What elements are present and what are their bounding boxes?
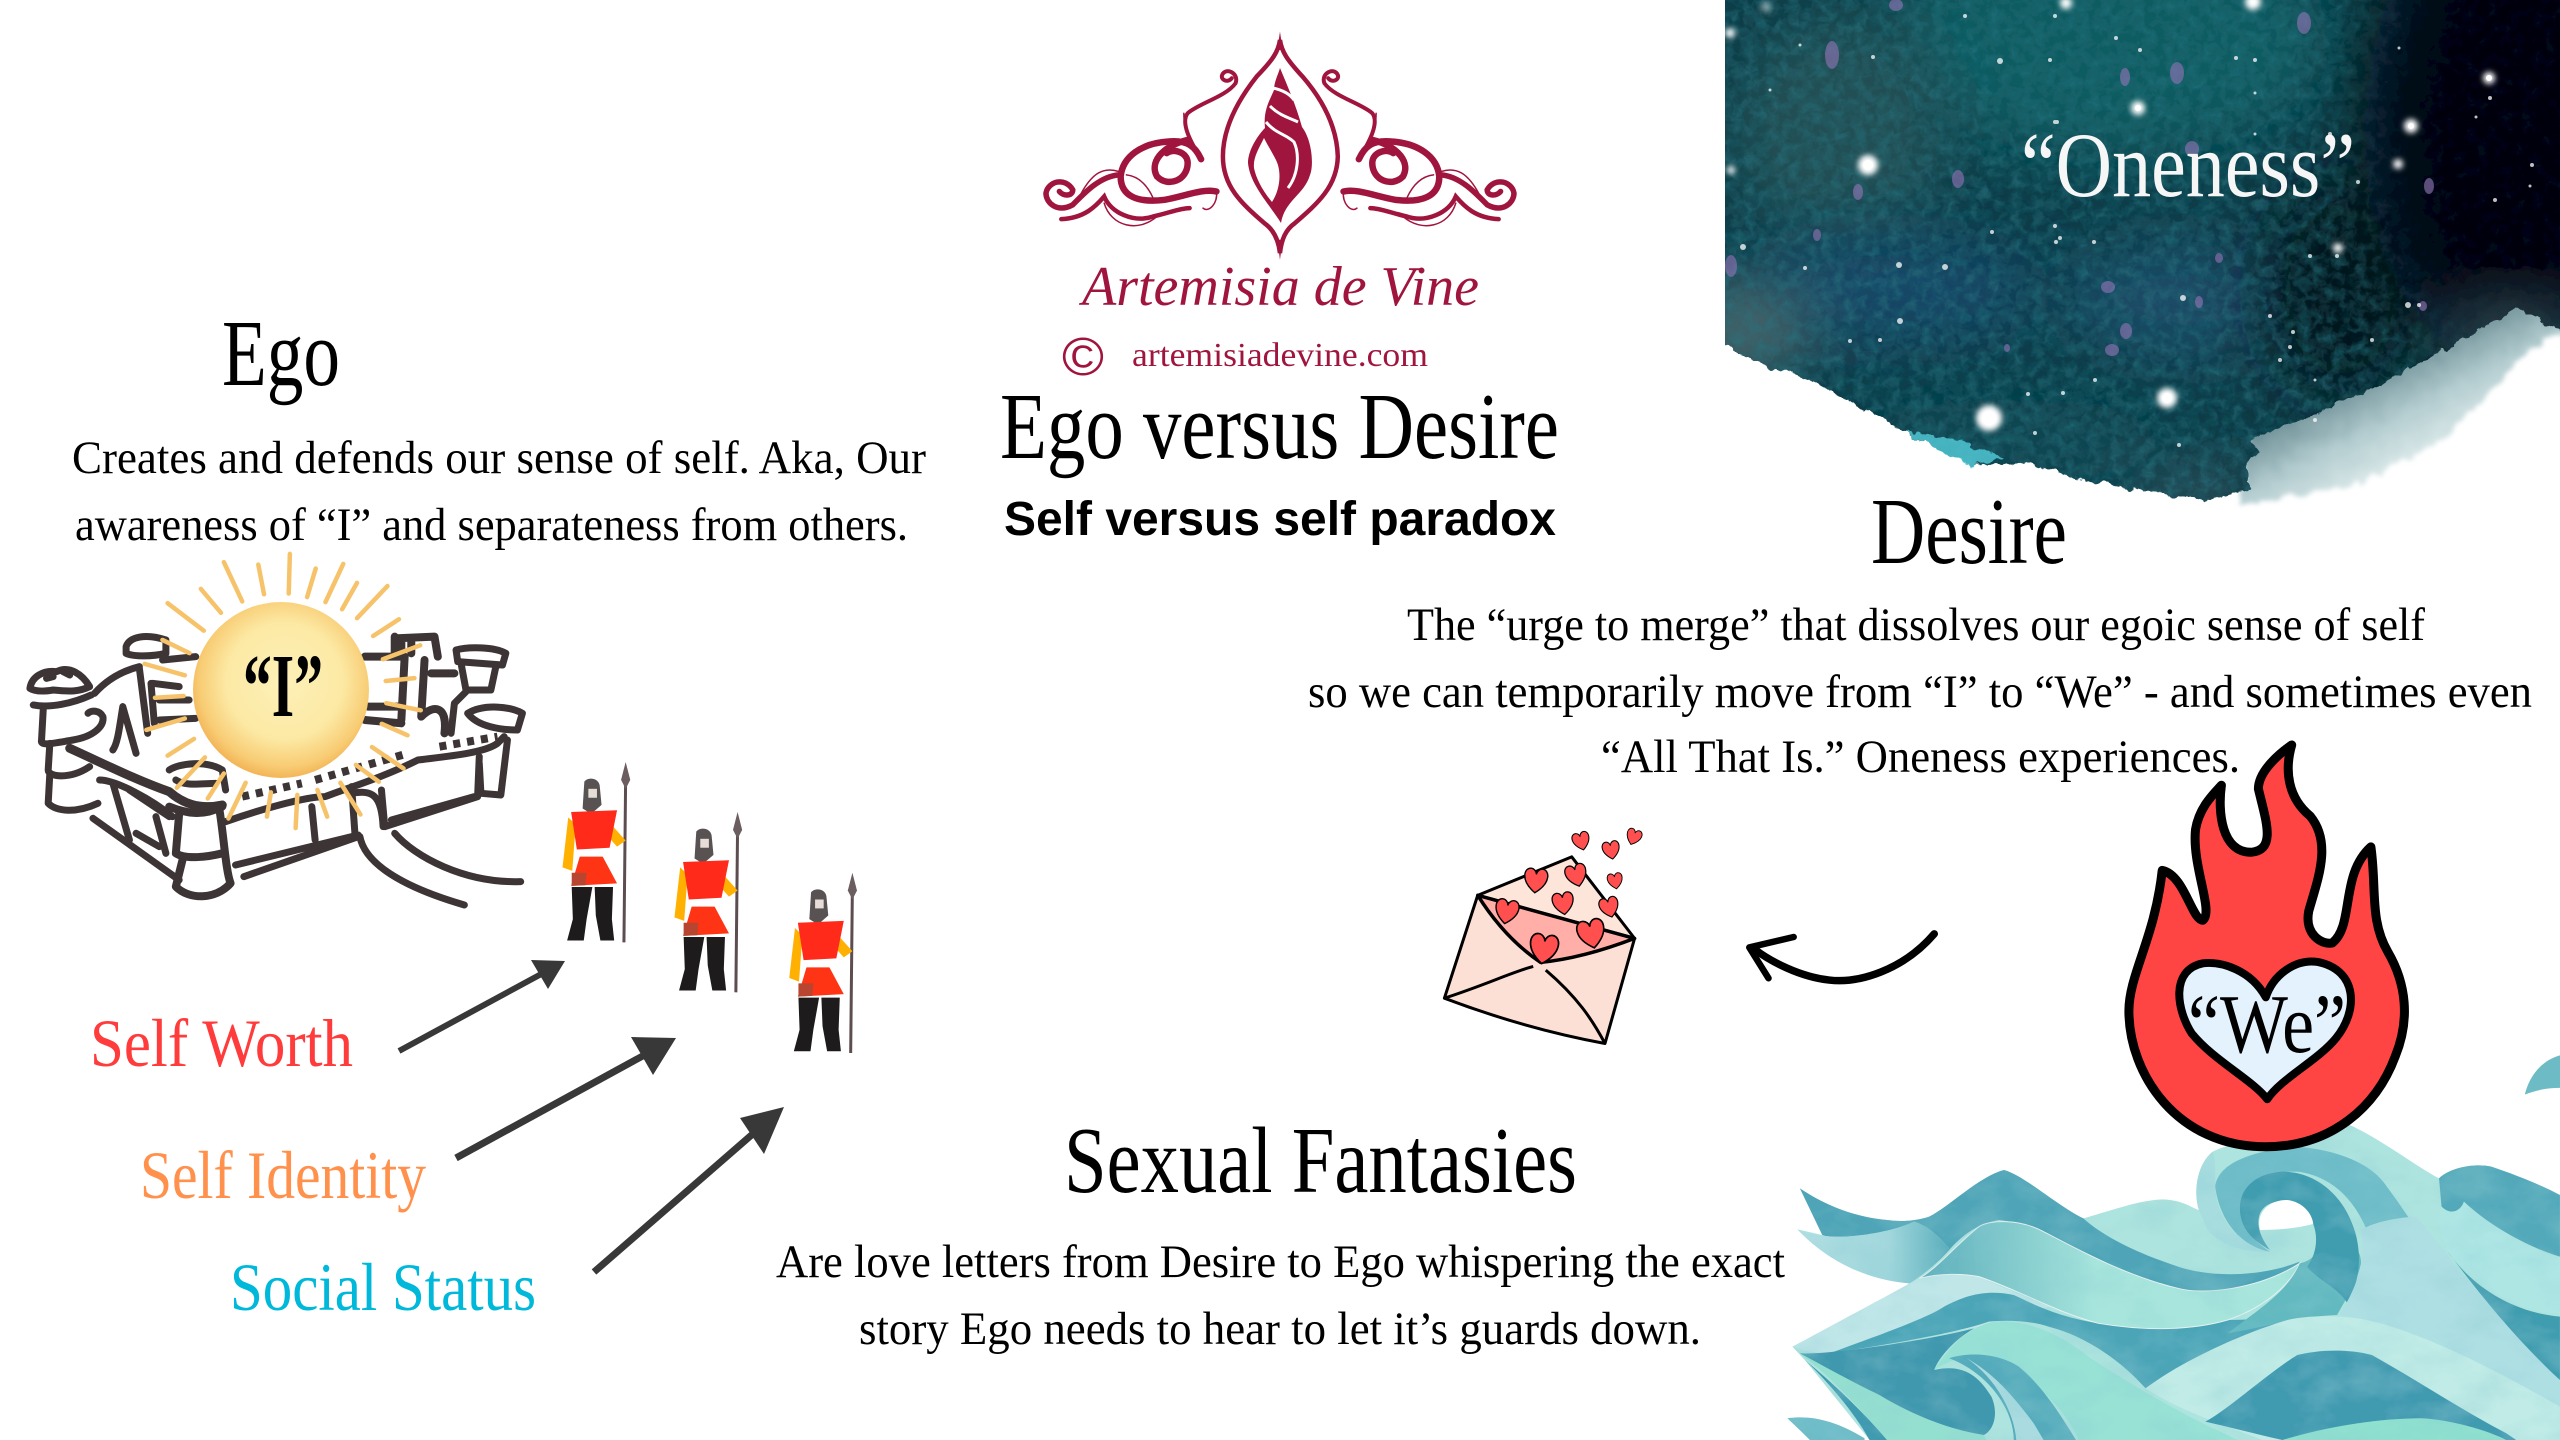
purple specks bbox=[1725, 0, 2434, 356]
cyan edge bbox=[1905, 431, 2002, 466]
logo website: artemisiadevine.com bbox=[1132, 337, 1428, 374]
text block: Sexual Fantasies description: story Ego needs to hear to let it’s guards down. bbox=[859, 1303, 1701, 1355]
illustration: love letter envelope bbox=[1444, 827, 1643, 1043]
heading: Ego: Ego bbox=[222, 302, 340, 406]
sky label: Oneness: “Oneness” bbox=[2021, 114, 2355, 216]
copyright mark: © bbox=[1062, 327, 1104, 387]
logo name: Artemisia de Vine bbox=[1078, 256, 1479, 318]
stars bbox=[1725, 0, 2534, 447]
panel: starry oneness sky bbox=[1725, 0, 2560, 507]
text block: Desire description: so we can temporarily move from “I” to “We” - and sometimes even bbox=[1308, 666, 2532, 718]
text block: Sexual Fantasies description: Are love letters from Desire to Ego whispering the exact bbox=[776, 1236, 1785, 1288]
label: Self Identity: Self Identity bbox=[140, 1137, 426, 1213]
text block: Desire description bbox=[1308, 599, 2532, 783]
arrow: Self Identity to guard bbox=[456, 1037, 676, 1158]
illustration: watercolour waves bbox=[1787, 1055, 2560, 1440]
logo: Artemisia de Vine bbox=[1046, 32, 1514, 387]
wave silhouette bbox=[1792, 1125, 2560, 1440]
heart label: “We” bbox=[2188, 978, 2346, 1071]
text block: Sexual Fantasies description bbox=[776, 1236, 1785, 1355]
text block: Ego description: awareness of “I” and separateness from others. bbox=[75, 499, 908, 551]
label: Self Worth: Self Worth bbox=[90, 1005, 353, 1081]
text block: Desire description: The “urge to merge” that dissolves our egoic sense of self bbox=[1407, 599, 2425, 651]
text block: Ego description: Creates and defends our sense of self. Aka, Our bbox=[72, 432, 926, 484]
title: Ego versus Desire bbox=[1000, 375, 1559, 479]
icon: sun bbox=[145, 554, 421, 828]
icon: flame with heart bbox=[2129, 745, 2404, 1147]
heading: Desire: Desire bbox=[1871, 480, 2067, 584]
pale wash at sky edge bbox=[2240, 295, 2560, 505]
arrow: Social Status to guard bbox=[594, 1107, 784, 1272]
text block: Ego description bbox=[72, 432, 926, 551]
wave curl opening bbox=[2259, 1200, 2313, 1230]
illustration: three guards bbox=[563, 762, 857, 1053]
logo emblem bbox=[1046, 32, 1514, 260]
arrow: curved, from flame to envelope bbox=[1749, 934, 1934, 981]
label: Social Status: Social Status bbox=[230, 1249, 536, 1325]
hearts bbox=[1493, 827, 1643, 966]
wave fragment, right edge bbox=[2525, 1055, 2560, 1095]
arrow: Self Worth to guard bbox=[399, 960, 565, 1051]
text block: Desire description: “All That Is.” Oneness experiences. bbox=[1601, 731, 2240, 783]
illustration: castle line drawing bbox=[30, 637, 522, 905]
heading: Sexual Fantasies: Sexual Fantasies bbox=[1064, 1109, 1577, 1213]
sun label: “I” bbox=[243, 637, 323, 736]
sun rays bbox=[145, 554, 421, 828]
subtitle: Self versus self paradox bbox=[1004, 493, 1556, 546]
